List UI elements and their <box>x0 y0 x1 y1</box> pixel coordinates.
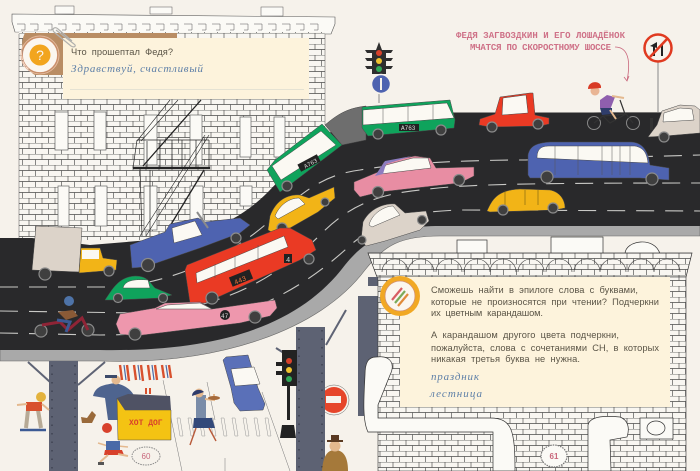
left brick building <box>12 6 335 240</box>
icon: question mark <box>21 36 59 74</box>
yellow tilted car <box>268 187 335 234</box>
no-turn road sign on a pole <box>644 34 672 112</box>
beige car at the right edge <box>648 105 700 142</box>
hot dog vendor <box>81 364 173 440</box>
parked blue car with crosswalk <box>163 355 290 471</box>
tilted green bus: А763 <box>303 157 319 170</box>
small green car <box>105 276 172 302</box>
exercise card <box>380 276 670 407</box>
beige car centre <box>358 204 429 246</box>
page number 61: 61 <box>550 452 559 461</box>
road lane markings <box>0 155 700 335</box>
question text: Что прошептал Федя? <box>71 47 173 57</box>
yellow car right <box>487 189 565 215</box>
icon: pencils <box>380 276 420 316</box>
page number 61 <box>541 445 567 467</box>
blue pickup <box>130 212 250 272</box>
caption about Fedya <box>456 30 626 53</box>
question card <box>21 28 309 99</box>
handwritten word: лестница: лестница <box>429 388 482 400</box>
page number 60 <box>132 447 160 465</box>
accordion joint of the bus <box>325 106 366 145</box>
icon: question mark: ? <box>36 47 44 63</box>
handwritten answer: Здравствуй, счастливый <box>71 63 204 75</box>
red car <box>479 93 549 132</box>
red double-decker bus <box>185 228 316 304</box>
handwritten word: праздник: праздник <box>431 371 480 383</box>
caption about Fedya: МЧАТСЯ ПО СКОРОСТНОМУ ШОССЕ <box>470 43 612 53</box>
hot dog vendor: ХОТ ДОГ <box>129 419 163 428</box>
green articulated bus <box>362 100 455 139</box>
paperclip <box>53 28 75 47</box>
caption about Fedya: ФЕДЯ ЗАГВОЗДКИН И ЕГО ЛОШАДЁНОК <box>456 30 626 41</box>
truck with beige box <box>32 226 117 280</box>
woman with hot dog <box>190 388 220 445</box>
fire escape <box>133 100 210 236</box>
card background <box>400 277 670 407</box>
road viaduct <box>0 112 700 361</box>
cyclist Fedya <box>588 82 640 130</box>
page number 60: 60 <box>142 452 151 461</box>
red double-decker bus: 443 <box>233 275 248 287</box>
instruction paragraph 2: пожалуйста, слова с сочетаниями СН, в которых <box>431 343 659 353</box>
long pink car: 47 <box>221 313 229 320</box>
red double-decker bus: 4 <box>286 257 290 265</box>
man with hat <box>322 435 348 471</box>
instruction paragraph 1 <box>431 285 659 318</box>
top traffic light and info sign <box>365 42 393 103</box>
rollerblading girl <box>98 423 128 465</box>
traffic light under bridge <box>276 350 297 438</box>
right steel pillar <box>276 310 346 471</box>
card: question <box>63 38 309 99</box>
instruction paragraph 2 <box>431 330 659 364</box>
pink sedan <box>354 156 474 198</box>
left steel pillar <box>28 361 105 471</box>
big blue bus <box>528 142 669 185</box>
road sign: no entry <box>319 385 349 415</box>
green articulated bus: А763 <box>401 125 416 132</box>
instruction paragraph 2: А карандашом другого цвета подчеркни, <box>431 330 619 340</box>
brown tape behind the card <box>22 33 177 75</box>
tilted green bus <box>267 124 342 192</box>
instruction paragraph 1: Сможешь найти в эпилоге слова с буквами, <box>431 285 638 295</box>
motorcyclist <box>35 296 94 337</box>
skateboarder <box>17 392 49 430</box>
instruction paragraph 1: которые не произносятся при чтении? Подчеркни <box>431 297 659 307</box>
right brick building <box>358 237 692 471</box>
instruction paragraph 2: никакая третья буква не нужна. <box>431 354 580 364</box>
instruction paragraph 1: их цветным карандашом. <box>431 308 543 318</box>
arrow to the cyclist <box>615 47 629 81</box>
long pink car <box>116 300 277 340</box>
